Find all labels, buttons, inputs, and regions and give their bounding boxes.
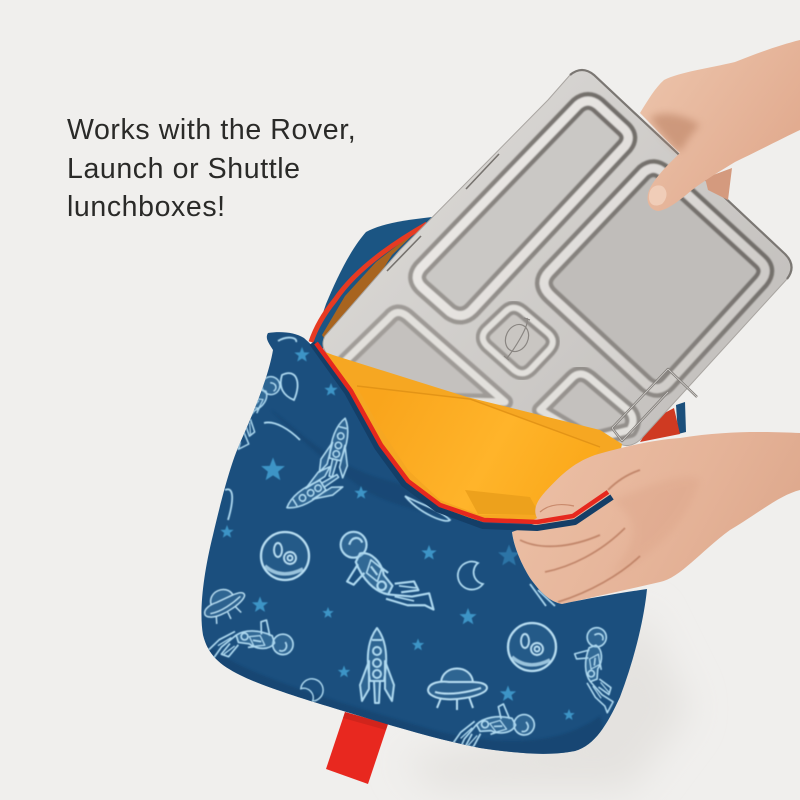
hand and thumb bbox=[640, 40, 800, 211]
palm, thumb and fingers bbox=[512, 432, 800, 604]
base edge shadow bbox=[200, 640, 610, 760]
back of fingers bbox=[705, 168, 732, 200]
flap fold shadow bbox=[292, 429, 482, 522]
heading text: Launch or Shuttle bbox=[67, 152, 301, 184]
red loop strap bbox=[326, 712, 388, 784]
tray body bbox=[323, 70, 792, 446]
lining inner bbox=[357, 387, 600, 515]
product illustration bbox=[201, 40, 800, 786]
zipper edge of flap bbox=[312, 343, 612, 528]
orange lining bbox=[320, 350, 622, 526]
compartment: large bbox=[544, 168, 765, 389]
blue bag body with flap bbox=[198, 332, 647, 782]
rockets bbox=[360, 628, 394, 703]
red side tab bbox=[590, 703, 614, 727]
compartment: long narrow bbox=[417, 101, 628, 316]
upper hand gripping tray bbox=[640, 40, 800, 211]
edge sketches bbox=[225, 338, 555, 606]
floor shadow bbox=[400, 610, 690, 790]
lower hand bbox=[512, 432, 800, 604]
bag front panel bbox=[201, 332, 647, 754]
wire clip bbox=[612, 369, 697, 441]
stainless steel lunchbox tray bbox=[323, 70, 792, 446]
shading and print bbox=[198, 338, 647, 782]
moons bbox=[458, 562, 483, 590]
heading text bbox=[67, 114, 356, 223]
compartment: lower right bbox=[540, 374, 633, 440]
planets bbox=[261, 532, 309, 580]
print pattern bbox=[203, 336, 614, 747]
icon: planet logo bbox=[501, 318, 533, 360]
compartment: lower left bbox=[343, 312, 505, 402]
compartment: square logo bbox=[483, 308, 553, 373]
stars bbox=[220, 347, 575, 720]
thumb crease over lining bbox=[540, 505, 574, 512]
gathered seam bbox=[465, 490, 540, 515]
astronauts bbox=[341, 532, 434, 610]
thumbnail bbox=[649, 185, 666, 206]
flying saucers bbox=[428, 668, 487, 710]
heading text: lunchboxes! bbox=[67, 191, 226, 223]
hinge slots bbox=[387, 154, 499, 271]
back panel of bag bbox=[311, 217, 686, 442]
palm shadow bbox=[650, 114, 700, 152]
heading text: Works with the Rover, bbox=[67, 114, 356, 146]
lining band bbox=[320, 350, 622, 526]
